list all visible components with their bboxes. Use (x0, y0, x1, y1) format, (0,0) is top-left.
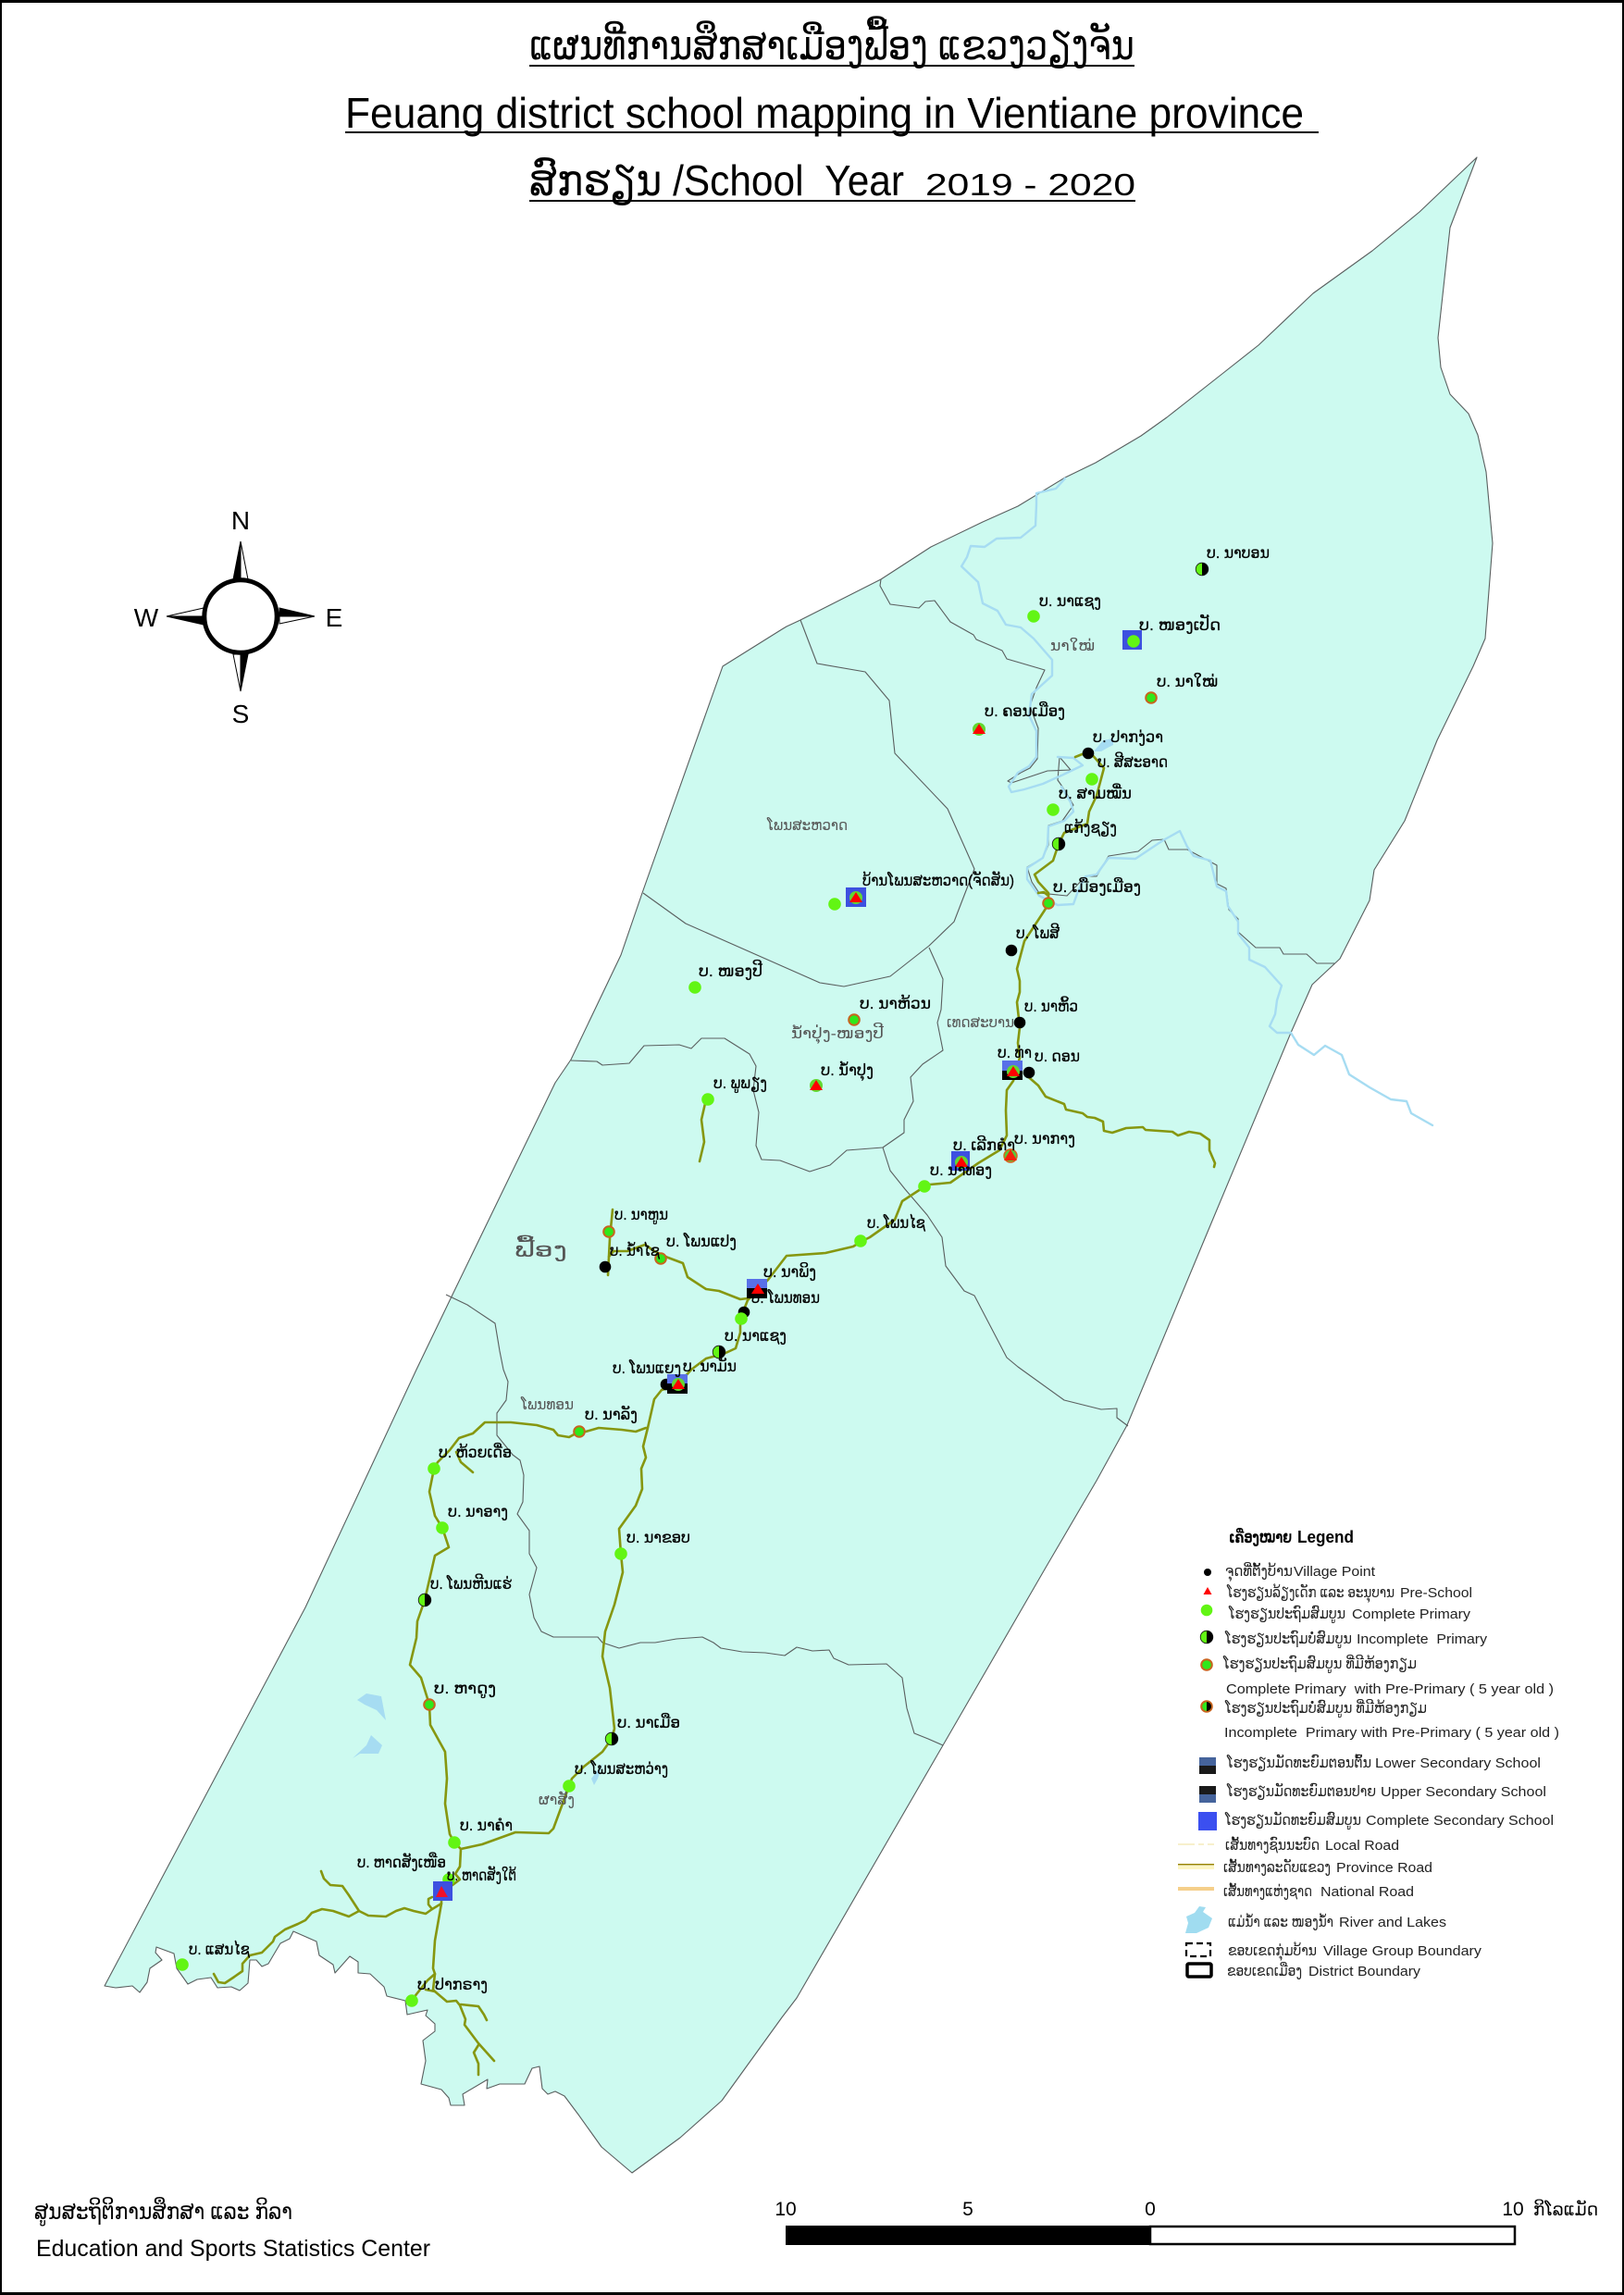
village: Ha Duang (424, 1680, 496, 1710)
icon: compass rose: S (232, 700, 249, 728)
title: Lao: ແຜນທີ່ການສຶກສາເມືອງຟື້ອງ ແຂວງວຽງຈັນ (529, 16, 1134, 68)
village: Pho Si (1006, 924, 1060, 956)
village: Na Ang (436, 1503, 508, 1534)
village: Phon Nyaeng (613, 1358, 688, 1394)
credit: statistics center (34, 2197, 430, 2262)
village: Phu Phiang: ບ. ພູພຽງ (713, 1074, 767, 1093)
title: school year (529, 156, 1135, 205)
village: Na Muea: ບ. ນາເມືອ (617, 1713, 680, 1731)
legend: complete primary with pre-primary: ໂຮງຮຽນປະຖົມສົມບູນ ທີ່ມີຫ້ອງກຽມ (1222, 1655, 1417, 1673)
village: Nam Xai (600, 1241, 660, 1272)
village: Tha: ບ. ທ່າ (998, 1044, 1032, 1061)
map: rivers and lakes (353, 478, 1432, 1785)
legend: province road: ເສັ້ນທາງລະດັບແຂວງ (1223, 1858, 1331, 1876)
title block (345, 16, 1319, 205)
village: Huai Duea: ບ. ຫ້ວຍເດື່ອ (439, 1443, 512, 1461)
village: Hat Sang south: ບ. ຫາດສັງໃຕ້ (447, 1865, 516, 1884)
lake: Pak Kang Wa (1094, 738, 1113, 751)
village: Phon Thong: ບ. ໂພນທອນ (751, 1288, 820, 1307)
village: Na Bon: ບ. ນາບອນ (1207, 544, 1270, 562)
village: Phon Paeng: ບ. ໂພນແປງ (666, 1232, 737, 1250)
village: Khon Mueang: ບ. ຄອນເມືອງ (985, 701, 1065, 720)
legend: village point (1204, 1562, 1376, 1582)
legend: village point: ຈຸດທີ່ຕັ້ງບ້ານ (1225, 1562, 1293, 1582)
village: Na Kham: ບ. ນາຄຳ (460, 1817, 513, 1834)
village: Na Thong (918, 1161, 992, 1193)
legend: upper secondary (1199, 1782, 1546, 1803)
village: Na Kang: ບ. ນາກາງ (1014, 1130, 1075, 1148)
village: Na Mai: ບ. ນາໃໝ່ (1157, 672, 1218, 690)
village: Phon Sawang: ບ. ໂພນສະຫວ່າງ (575, 1759, 668, 1778)
village: Nam Pung: ບ. ນ້ຳປຸງ (821, 1061, 874, 1082)
legend: complete secondary (1198, 1811, 1554, 1830)
village: Nong Pi: ບ. ໜອງປີ (699, 960, 762, 980)
icon: compass rose: N (231, 506, 250, 535)
village: Na Lang: ບ. ນາລັງ (585, 1404, 638, 1423)
map: roads (214, 751, 1215, 2075)
village: Phon Thong (735, 1288, 820, 1325)
legend: village group boundary: ຂອບເຂດກຸ່ມບ້ານ (1228, 1941, 1317, 1961)
village: Ha Duang: ບ. ຫາດູງ (434, 1680, 496, 1698)
village: Na Thong: ບ. ນາທອງ (930, 1161, 992, 1179)
village: Pho Si: ບ. ໂພສີ (1016, 924, 1060, 942)
village: Na Kang (1004, 1130, 1075, 1162)
village: Si Sa-at (1085, 752, 1168, 786)
legend: district boundary: ຂອບເຂດເມືອງ (1227, 1962, 1302, 1979)
legend: incomplete primary: ໂຮງຮຽນປະຖົມບໍ່ສົມບູນ (1224, 1630, 1352, 1648)
village: Saen Xai: ບ. ແສນໄຊ (189, 1940, 250, 1959)
village: Phon Sawat resettlement (828, 870, 1014, 911)
legend: village point: Village Point (1294, 1564, 1376, 1580)
legend: village group boundary (1186, 1941, 1482, 1961)
village: Na Lang (574, 1404, 638, 1437)
legend: village group boundary: Village Group Boundary (1323, 1943, 1482, 1959)
village: Nong Pet (1122, 613, 1221, 650)
legend title: Legend (1297, 1528, 1354, 1546)
village: Phon Hin Hae: ບ. ໂພນຫີນແຮ່ (430, 1574, 512, 1593)
legend: river and lakes: River and Lakes (1339, 1915, 1446, 1930)
legend: incomplete primary with pre-primary: Incomplete Primary with Pre-Primary ( 5 year old ) (1224, 1725, 1559, 1741)
group name: Feuang: ຟື້ອງ (514, 1235, 567, 1261)
village: Nam Pung (810, 1061, 874, 1092)
legend: incomplete primary with pre-primary: ໂຮງຮຽນປະຖົມບໍ່ສົມບູນ ທີ່ມີຫ້ອງກຽມ (1224, 1699, 1427, 1718)
legend: incomplete primary: Incomplete Primary (1357, 1631, 1488, 1647)
lake: west 1 (357, 1693, 386, 1720)
legend: province road: Province Road (1336, 1860, 1432, 1876)
icon: compass rose (134, 506, 342, 728)
title: school year: 2019 - 2020 (925, 167, 1135, 202)
scale bar: ກິໂລແມັດ (1533, 2198, 1598, 2220)
village: Na Ang: ບ. ນາອາງ (448, 1503, 508, 1520)
legend title (1229, 1527, 1354, 1546)
group name: Nam Pung-Nong Pi: ນ້ຳປຸ່ງ-ໜອງປີ (791, 1023, 884, 1044)
legend: national road (1178, 1882, 1414, 1900)
title: English: Feuang district school mapping in Vientiane province (345, 89, 1304, 137)
legend: local road (1178, 1836, 1399, 1854)
icon: compass rose: E (326, 603, 342, 632)
lake: west 2 (353, 1735, 382, 1758)
village: Pak Kang Wa: ບ. ປາກງ່ວາ (1093, 728, 1163, 746)
village: Huai Duea (428, 1443, 512, 1475)
legend: upper secondary: ໂຮງຮຽນມັດທະຍົມຕອນປາຍ (1226, 1782, 1376, 1800)
group name: Pha Sang: ຜາສັງ (539, 1791, 575, 1808)
village: Si Sa-at: ບ. ສີສະອາດ (1097, 752, 1168, 771)
map labels: village groups (514, 638, 1095, 1808)
map: school and village markers (176, 544, 1270, 2007)
village: Phon Paeng (655, 1232, 737, 1264)
scale bar: 10 (775, 2199, 797, 2220)
title: school year: ສົກຮຽນ /School Year (529, 156, 904, 205)
village: Phon Hin Hae (418, 1574, 512, 1606)
village: Na Hun (603, 1206, 668, 1237)
village: Kaeng Xiang: ແກ້ງຊຽງ (1064, 818, 1117, 837)
village: Loek Kham (951, 1135, 1015, 1171)
legend: district boundary (1187, 1962, 1421, 1979)
credit: statistics center: ສູນສະຖິຕິການສຶກສາ ແລະ ກິລາ (34, 2197, 292, 2227)
legend: pre-school: ໂຮງຮຽນລ້ຽງເດັກ ແລະ ອະນຸບານ (1226, 1583, 1395, 1603)
village: Sam Muen: ບ. ສາມໝື່ນ (1059, 784, 1132, 802)
legend: district boundary: District Boundary (1308, 1964, 1421, 1979)
village: Phon Xai (854, 1213, 925, 1247)
village: Saen Xai (176, 1940, 250, 1971)
village: Na Saeng north (1027, 592, 1101, 623)
legend: local road: Local Road (1325, 1838, 1399, 1854)
village: Na Phing: ບ. ນາພິງ (763, 1262, 816, 1281)
legend: province road (1178, 1858, 1432, 1876)
legend: lower secondary: ໂຮງຮຽນມັດທະຍົມຕອນຕົ້ນ (1226, 1754, 1371, 1771)
village: Na Huan (849, 994, 931, 1025)
village: Na Hio: ບ. ນາຫິ້ວ (1024, 997, 1078, 1015)
village: Don: ບ. ດອນ (1035, 1048, 1080, 1065)
legend: upper secondary: Upper Secondary School (1381, 1784, 1546, 1800)
legend: river and lakes (1185, 1906, 1446, 1933)
legend: national road: ເສັ້ນທາງແຫ່ງຊາດ (1223, 1882, 1312, 1900)
village: Na Man: ບ. ນາມັນ (683, 1356, 737, 1375)
legend: complete primary: Complete Primary (1352, 1606, 1471, 1622)
village: Pak Kang Wa (1083, 728, 1163, 759)
village: Khon Mueang (973, 701, 1065, 736)
village: Hat Sang north (357, 1852, 455, 1886)
village: Na Hun: ບ. ນາຫູນ (614, 1206, 668, 1224)
legend: complete secondary: ໂຮງຮຽນມັດທະຍົມສົມບູນ (1224, 1811, 1361, 1830)
village: Phon Nyaeng: ບ. ໂພນແຍງ (613, 1358, 681, 1377)
village: Na Muea (605, 1713, 680, 1745)
legend: pre-school (1203, 1583, 1472, 1603)
legend: local road: ເສັ້ນທາງຊົນນະບົດ (1225, 1836, 1320, 1854)
village: Na Khop (614, 1529, 690, 1560)
village: Phon Sawang (563, 1759, 668, 1793)
village: Na Kham (448, 1817, 513, 1849)
scale bar: 0 (1145, 2199, 1156, 2220)
village: Phon Xai: ບ. ໂພນໄຊ (867, 1213, 925, 1233)
legend: complete secondary: Complete Secondary School (1366, 1813, 1554, 1829)
village: Na Phing (747, 1262, 816, 1298)
legend: lower secondary: Lower Secondary School (1375, 1755, 1541, 1771)
village: Phon Sawat resettlement: ບ້ານໂພນສະຫວາດ(ຈັດສັນ) (862, 870, 1014, 889)
group name: Na Mai: ນາໃໝ່ (1050, 638, 1095, 654)
legend: national road: National Road (1320, 1884, 1414, 1900)
legend: complete primary (1201, 1605, 1471, 1623)
village: Loek Kham: ບ. ເລີກຄຳ (953, 1135, 1015, 1154)
legend: pre-school: Pre-School (1400, 1585, 1472, 1601)
scale bar: 10 (1502, 2199, 1524, 2220)
village: Mueang Mueang: ບ. ເມືອງເມືອງ (1053, 877, 1141, 896)
icon: compass rose: W (134, 603, 159, 632)
group name: Phon Thong: ໂພນທອນ (520, 1396, 574, 1413)
map: village group boundaries (446, 579, 1334, 1745)
village: Pak Hang (405, 1976, 488, 2007)
legend: river and lakes: ແມ່ນ້ຳ ແລະ ໜອງນ້ຳ (1228, 1913, 1333, 1930)
legend: lower secondary (1199, 1754, 1541, 1774)
legend: incomplete primary with pre-primary (1201, 1699, 1559, 1741)
village: Mueang Mueang (1043, 877, 1141, 909)
village: Tha (998, 1044, 1032, 1080)
village: Na Huan: ບ. ນາຫ້ວນ (860, 994, 931, 1012)
map: district shape (105, 157, 1493, 2173)
village: Nam Xai: ບ. ນ້ຳໄຊ (610, 1241, 660, 1260)
village: Phu Phiang (701, 1074, 767, 1106)
scale bar (775, 2198, 1598, 2245)
village: Na Khop: ບ. ນາຂອບ (626, 1529, 690, 1546)
village: Hat Sang south (433, 1865, 516, 1901)
village: Na Mai (1146, 672, 1218, 703)
legend: complete primary: ໂຮງຮຽນປະຖົມສົມບູນ (1228, 1605, 1345, 1623)
village: Na Bon (1196, 544, 1270, 576)
group name: Municipality: ເທດສະບານ (947, 1015, 1014, 1031)
credit: statistics center: Education and Sports Statistics Center (36, 2236, 430, 2262)
village: Sam Muen (1047, 784, 1132, 816)
village: Nong Pet: ບ. ໜອງເປັດ (1139, 613, 1221, 634)
lake: east small (591, 1764, 602, 1785)
legend: incomplete primary (1200, 1630, 1488, 1648)
legend (1178, 1527, 1559, 1979)
village: Pak Hang: ບ. ປາກຣາງ (417, 1976, 488, 1993)
legend title: ເຄື່ອງໝາຍ (1229, 1527, 1292, 1546)
village: Kaeng Xiang (1052, 818, 1117, 850)
group name: Phon Sawat: ໂພນສະຫວາດ (766, 817, 848, 834)
village: Don (1023, 1048, 1080, 1078)
village: Na Hio (1014, 997, 1078, 1028)
village: Nong Pi (688, 960, 762, 994)
village: Na Saeng north: ບ. ນາແຊງ (1039, 592, 1101, 611)
legend: complete primary with pre-primary: Complete Primary with Pre-Primary ( 5 year old ) (1226, 1681, 1554, 1697)
village: Na Saeng south: ບ. ນາແຊງ (725, 1327, 787, 1346)
legend: complete primary with pre-primary (1201, 1655, 1554, 1697)
village: Na Saeng south (713, 1327, 787, 1358)
scale bar: 5 (962, 2199, 973, 2220)
village: Hat Sang north: ບ. ຫາດສັງເໜືອ (357, 1852, 446, 1871)
